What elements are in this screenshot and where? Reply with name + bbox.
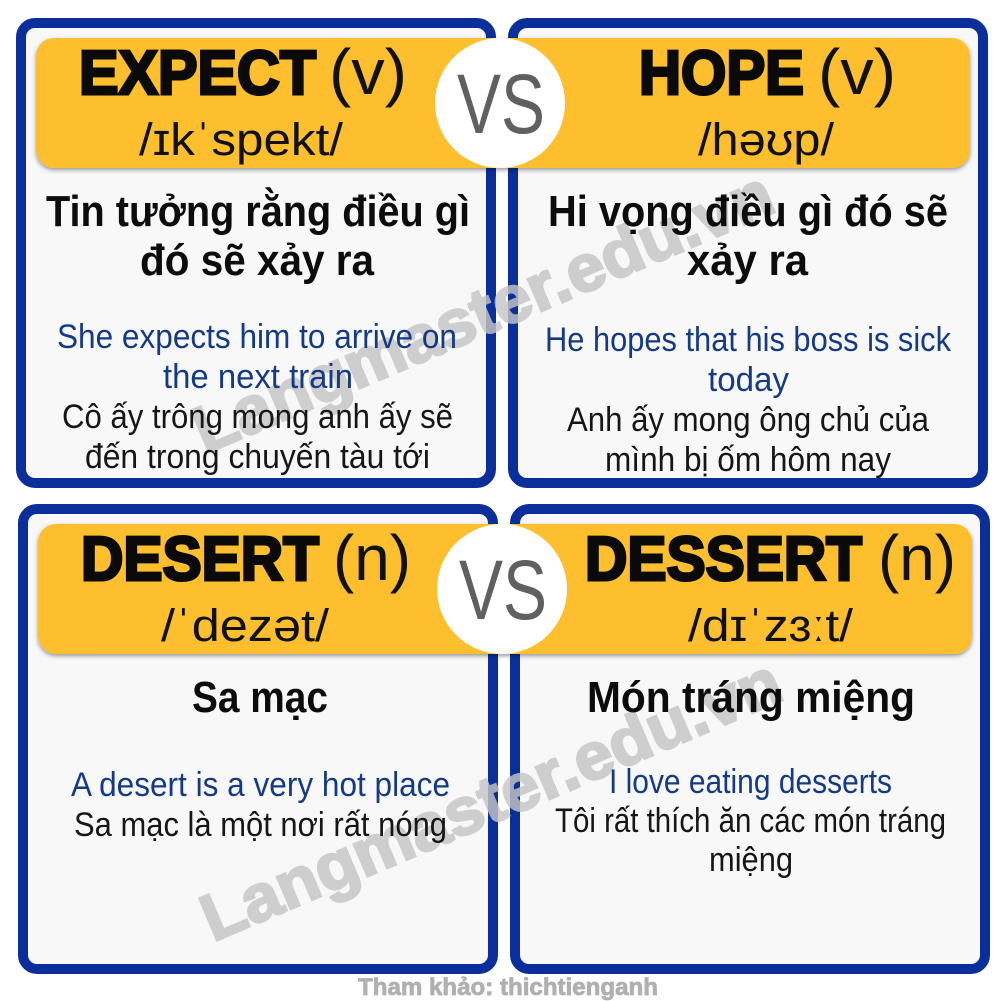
source credit: Tham khảo: thichtienganh xyxy=(358,974,658,1001)
translation: hope: mình bị ốm hôm nay xyxy=(605,441,891,479)
vs badge: bottom xyxy=(437,524,567,654)
example: hope: today xyxy=(708,361,789,399)
example: expect: the next train xyxy=(163,358,353,396)
heading: expect: EXPECT xyxy=(79,39,316,108)
example: dessert: I love eating desserts xyxy=(609,763,892,801)
example: desert: A desert is a very hot place xyxy=(71,766,450,804)
definition: dessert: Món tráng miệng xyxy=(587,673,915,722)
definition: expect: Tin tưởng rằng điều gì xyxy=(46,186,470,236)
heading: hope: HOPE xyxy=(639,39,804,108)
phonetic: desert: /ˈdezət/ xyxy=(161,600,330,651)
panel: expect xyxy=(21,23,491,483)
definition: hope: xảy ra xyxy=(687,236,808,285)
translation: dessert: miệng xyxy=(709,841,793,879)
definition: desert: Sa mạc xyxy=(192,673,328,722)
heading: dessert: DESSERT xyxy=(585,525,862,594)
example: hope xyxy=(545,321,952,399)
heading: dessert: (n) xyxy=(878,522,956,594)
heading: expect: (v) xyxy=(329,36,407,108)
panel: desert xyxy=(23,509,493,969)
definition: hope: Hi vọng điều gì đó sẽ xyxy=(548,187,948,236)
heading: desert: (n) xyxy=(333,522,411,594)
watermark: bottom: Langmaster.edu.vn xyxy=(190,643,792,955)
example: expect xyxy=(57,318,457,396)
example: hope: He hopes that his boss is sick xyxy=(545,321,952,359)
definition: hope xyxy=(548,187,948,285)
vs badge: bottom: VS xyxy=(459,543,547,637)
header band: top row xyxy=(36,38,970,168)
translation: dessert xyxy=(555,802,946,879)
translation: expect xyxy=(62,398,453,476)
translation: dessert: Tôi rất thích ăn các món tráng xyxy=(555,802,946,840)
translation: expect: Cô ấy trông mong anh ấy sẽ xyxy=(62,398,453,436)
panel: dessert xyxy=(515,509,985,969)
vs badge: top: VS xyxy=(457,57,545,151)
vs badge: top xyxy=(435,38,565,168)
phonetic: hope: /həʊp/ xyxy=(698,114,835,165)
example: expect: She expects him to arrive on xyxy=(57,318,457,356)
heading: desert: DESERT xyxy=(81,525,319,594)
phonetic: dessert: /dɪˈzɜːt/ xyxy=(688,600,854,651)
definition: expect xyxy=(46,186,470,285)
header band: bottom row xyxy=(38,524,972,654)
translation: hope: Anh ấy mong ông chủ của xyxy=(567,401,929,439)
translation: expect: đến trong chuyến tàu tới xyxy=(85,438,430,476)
translation: hope xyxy=(567,401,929,479)
definition: expect: đó sẽ xảy ra xyxy=(140,236,374,285)
phonetic: expect: /ɪkˈspekt/ xyxy=(139,114,344,165)
translation: desert: Sa mạc là một nơi rất nóng xyxy=(74,806,447,844)
heading: hope: (v) xyxy=(818,36,896,108)
watermark: top: Langmaster.edu.vn xyxy=(182,155,784,467)
panel: hope xyxy=(513,23,983,483)
heading: hope xyxy=(639,36,896,108)
